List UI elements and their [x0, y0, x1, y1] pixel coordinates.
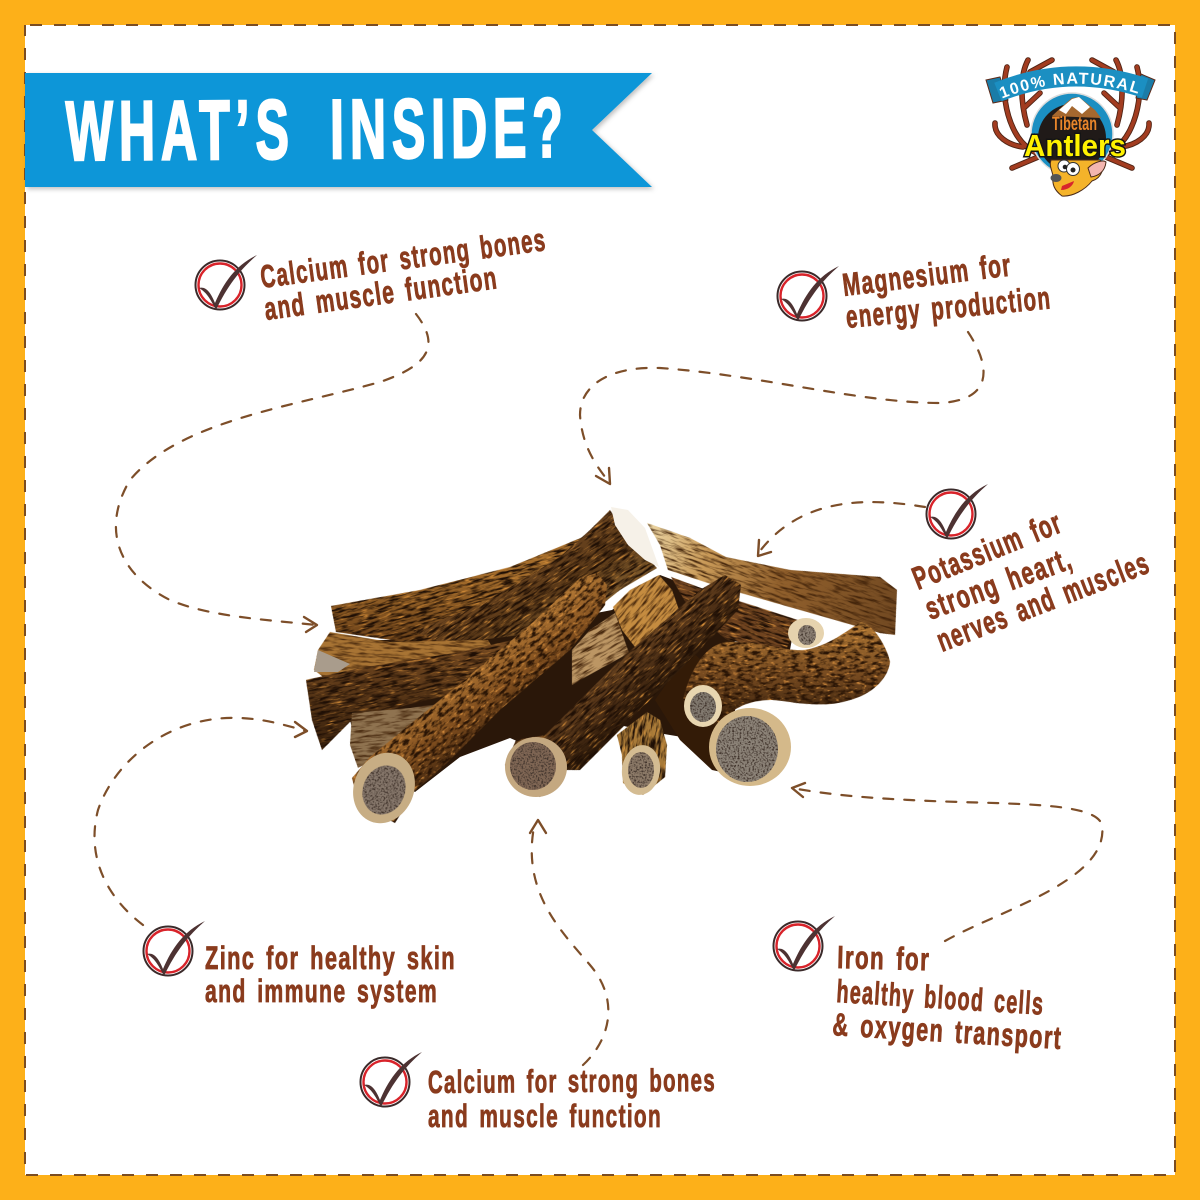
antler: dark under right	[655, 650, 735, 775]
logo snow caps	[1059, 97, 1090, 114]
text block: healthy blood cells	[836, 973, 1045, 1022]
text block: Calcium for strong bones	[258, 221, 548, 295]
text block: Potassium for	[907, 504, 1067, 596]
antler: main orange diagonal	[229, 447, 730, 949]
antler: dark end core	[510, 742, 556, 790]
text block: Zinc for healthy skin	[205, 940, 456, 976]
text block: energy production	[844, 279, 1053, 335]
text block	[832, 939, 1063, 1056]
banner ribbon	[25, 73, 652, 187]
logo Antlers wordmark: Antlers	[1024, 128, 1126, 163]
antler: curved right	[678, 611, 895, 736]
antler: upper right cut end	[788, 618, 824, 648]
check icon	[926, 484, 988, 539]
antler: small bottom center	[603, 703, 681, 804]
callout: potassium	[907, 484, 1155, 659]
antler: pale left short	[311, 622, 503, 692]
antler: left short cut end	[314, 650, 350, 672]
text block: & oxygen transport	[832, 1006, 1063, 1056]
check icon	[144, 921, 205, 976]
callout: iron	[774, 916, 1063, 1056]
title text: WHAT’S INSIDE?	[65, 80, 569, 178]
logo ribbon tails	[986, 74, 1155, 103]
text block: and muscle function	[262, 259, 500, 327]
antler: small end ring	[619, 743, 663, 797]
text block	[428, 1062, 716, 1134]
text block: Magnesium for	[840, 246, 1014, 303]
antler: white cut end	[611, 507, 659, 567]
text block: and muscle function	[428, 1098, 662, 1134]
antler: center tall pale	[578, 543, 714, 679]
antler: curved end ring	[684, 685, 722, 727]
antler: big end ring	[709, 708, 791, 786]
arrow: iron to antlers	[792, 783, 1102, 941]
text block	[205, 940, 456, 1009]
antler: center back pale chunk	[541, 588, 660, 710]
text block: Iron for	[837, 939, 931, 977]
check icon	[778, 266, 839, 321]
logo badge circle	[1031, 93, 1113, 175]
logo ribbon	[998, 76, 1145, 92]
arrow: zinc to antlers	[94, 718, 307, 925]
callout: zinc	[144, 921, 456, 1009]
check icon	[774, 916, 835, 971]
title banner	[25, 73, 652, 187]
arrow: calcium top to antlers	[116, 314, 428, 632]
arrow: magnesium to antlers	[580, 332, 984, 484]
antler: orange end core	[355, 759, 413, 821]
logo Tibetan wordmark: Tibetan	[1052, 114, 1097, 135]
check icon	[360, 1052, 422, 1107]
antler: left dark log	[285, 588, 581, 798]
arrow: potassium to antlers	[757, 502, 925, 556]
check icon	[196, 255, 257, 310]
antler pile photo	[229, 399, 930, 949]
text block	[840, 246, 1053, 335]
antler: orange end ring	[343, 743, 425, 833]
logo antlers fill	[995, 60, 1149, 168]
text block: and immune system	[205, 973, 438, 1009]
antler: pale top right	[614, 450, 930, 708]
callout: calcium bottom	[360, 1052, 716, 1134]
logo antlers outline	[995, 60, 1149, 168]
logo mountains	[1052, 97, 1101, 118]
logo: Tibetan Antlers 100% natural	[985, 57, 1156, 197]
antler: upper right cut core	[798, 625, 816, 645]
text block: Calcium for strong bones	[428, 1062, 716, 1100]
antler: right back log	[650, 540, 819, 687]
antler: lower left gray	[344, 690, 476, 778]
antler pile dark backing	[330, 575, 795, 792]
callout: calcium top	[196, 221, 548, 327]
antler: back upper left	[305, 460, 656, 712]
antler: big end core	[716, 716, 778, 782]
antler: small end core	[628, 752, 654, 788]
antler: main dark diagonal	[395, 458, 851, 914]
arrow: calcium bottom to antlers	[530, 820, 608, 1065]
antler: dark end ring	[505, 737, 567, 797]
logo deer head	[1050, 160, 1106, 196]
logo ribbon text: 100% NATURAL	[1000, 72, 1138, 98]
logo badge inner	[1038, 104, 1106, 172]
callout: magnesium	[778, 246, 1053, 335]
text block	[258, 221, 548, 327]
antler: curved end core	[690, 692, 716, 722]
antler: dark top log	[353, 399, 717, 753]
text block: strong heart,	[920, 540, 1077, 627]
